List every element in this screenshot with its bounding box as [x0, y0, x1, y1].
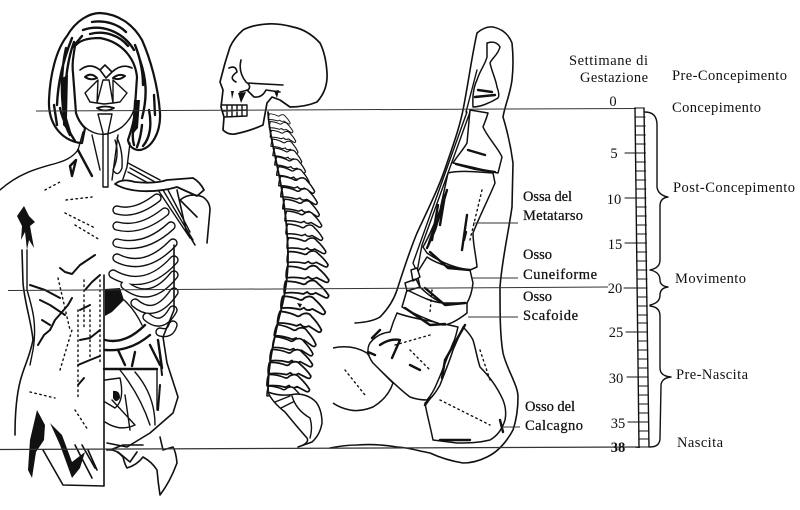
bone labels: Osso [523, 247, 552, 263]
calcaneus [425, 327, 506, 443]
metatarsal [423, 171, 495, 270]
stage labels: Movimento [675, 271, 746, 287]
bone labels [523, 189, 597, 434]
week numbers: 35 [611, 416, 625, 432]
abdominal organs right half [104, 288, 178, 447]
proximal phalanx [453, 110, 502, 173]
brace: pre-birth [650, 306, 671, 447]
rib cage [113, 198, 174, 337]
figure: woman's torso anatomy [0, 13, 210, 495]
week numbers [607, 94, 625, 456]
bone labels: Ossa del [523, 189, 572, 205]
horizontal line: movement [8, 287, 608, 290]
week numbers: 0 [609, 94, 617, 110]
torso muscles left half [15, 182, 104, 486]
tibia and fibula head [333, 347, 393, 411]
stage labels: Pre-Concepimento [672, 68, 787, 84]
brace: post-conception [645, 112, 668, 270]
clavicle and shoulder [115, 178, 210, 245]
axis title: Settimane di [569, 53, 648, 69]
week numbers: 20 [608, 281, 622, 297]
week numbers: 38 [611, 440, 625, 456]
face [76, 65, 135, 134]
cuneiform [417, 257, 473, 303]
bone labels: Osso del [525, 399, 575, 415]
horizontal line: conception [36, 108, 636, 111]
figure: foot skeleton in profile [330, 27, 518, 463]
pelvis [107, 437, 177, 495]
stage labels [672, 68, 795, 451]
bone labels: Cuneiforme [523, 267, 597, 283]
figure: skull and spine in profile [220, 24, 330, 447]
leader lines to bones [468, 223, 520, 427]
sacrum and coccyx [268, 392, 322, 447]
week numbers: 25 [609, 325, 623, 341]
gestation weeks ruler [624, 108, 649, 447]
week numbers: 30 [609, 371, 623, 387]
horizontal line: birth [0, 447, 640, 450]
foot outline [330, 27, 518, 463]
week numbers: 5 [610, 146, 618, 162]
stage labels: Concepimento [672, 100, 761, 116]
talus [368, 313, 458, 400]
distal phalanx [473, 42, 500, 107]
bone labels: Calcagno [525, 418, 583, 434]
stage labels: Nascita [677, 435, 724, 451]
stage labels: Post-Concepimento [673, 180, 795, 196]
brace: movement [650, 270, 668, 305]
bone labels: Scafoide [523, 308, 578, 324]
axis title [569, 53, 648, 86]
navicular [402, 290, 467, 325]
bone labels: Osso [523, 289, 552, 305]
skull [220, 24, 327, 134]
stage labels: Pre-Nascita [676, 367, 749, 383]
bone labels: Metatarso [523, 208, 583, 224]
hair [49, 13, 160, 150]
week numbers: 10 [607, 192, 621, 208]
tendon [413, 70, 477, 272]
axis title: Gestazione [580, 70, 648, 86]
bone shading [368, 90, 503, 440]
sesamoid bones [405, 268, 420, 291]
week numbers: 15 [608, 237, 622, 253]
spine vertebrae [266, 112, 330, 403]
trachea and neck [0, 114, 193, 240]
